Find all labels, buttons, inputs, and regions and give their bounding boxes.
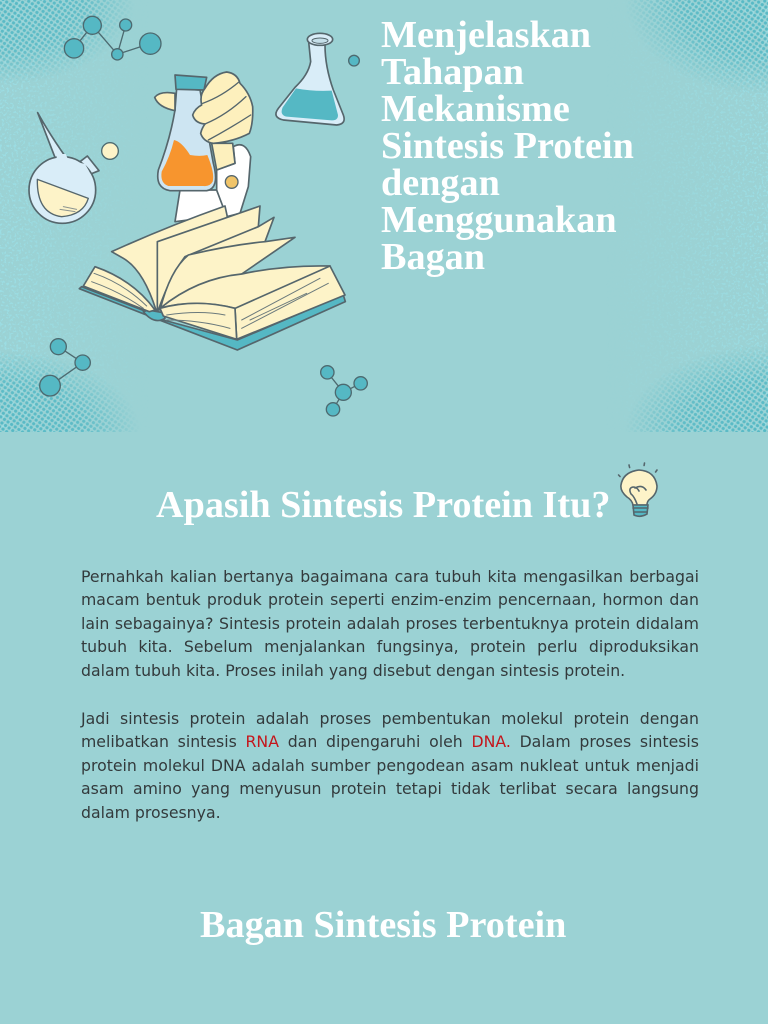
heading: Bagan Sintesis Protein: Bagan Sintesis Protein [200,904,566,946]
icon: lab coat sleeve [175,145,251,222]
text block: definition paragraph: dalam prosesnya. [81,803,221,822]
text block: intro paragraph: tubuh kita. Sebelum menjalankan fungsinya, protein perlu diproduksikan [81,637,699,656]
icon: round flask left [29,113,99,223]
title: dengan [381,162,500,204]
title [381,14,634,278]
text block: intro paragraph: macam bentuk produk protein seperti enzim-enzim pencernaan, hormon dan [81,590,699,609]
icon: molecule lower left [40,339,90,396]
title: Mekanisme [381,88,570,130]
illustration: science lab and book [28,16,368,417]
icon: light bulb [618,462,658,518]
text block: intro paragraph: dalam tubuh kita. Proses inilah yang disebut dengan sintesis protein. [81,661,625,680]
text block: definition paragraph: Jadi sintesis protein adalah proses pembentukan molekul protein dengan [81,709,699,728]
text block: intro paragraph [81,567,699,680]
panel: halftone header background [0,0,768,432]
icon: orange flask [158,75,216,191]
title: Sintesis Protein [381,124,634,166]
text block: definition paragraph: melibatkan sintesis RNA dan dipengaruhi oleh DNA. Dalam proses sintesis [81,732,699,751]
title: Menggunakan [381,198,617,240]
text block: intro paragraph: lain sebagainya? Sintesis protein adalah proses terbentuknya protein didalam [81,614,699,633]
heading: Apasih Sintesis Protein Itu: Apasih Sintesis Protein Itu? [156,484,610,526]
icon: open book [79,206,345,350]
title: Menjelaskan [381,14,591,56]
text block: intro paragraph: Pernahkah kalian bertanya bagaimana cara tubuh kita mengasilkan berbagai [81,567,699,586]
icon: gloved hand [155,72,253,170]
text block: definition paragraph: asam amino yang menyusun protein tetapi tidak terlibat secara langsung [81,779,699,798]
icon: coat button [225,176,238,188]
text block: definition paragraph: protein molekul DNA adalah sumber pengodean asam nukleat untuk menjadi [81,756,699,775]
icon: molecule lower right [321,366,367,416]
text block: definition paragraph [80,709,699,822]
icon: small bubble cream [102,143,118,159]
icon: small bubble teal [349,55,359,66]
title: Bagan [381,236,485,278]
title: Tahapan [381,50,524,92]
icon: conical flask right [276,33,344,125]
icon: molecule top [64,16,161,60]
